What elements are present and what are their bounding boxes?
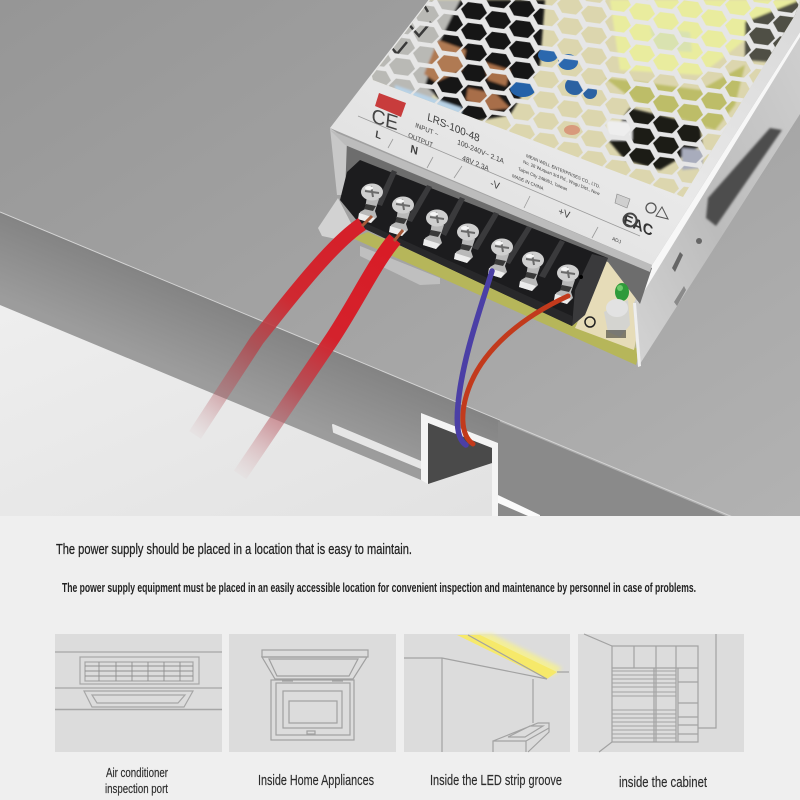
caption: LED groove: Inside the LED strip groove	[430, 773, 562, 789]
caption: cabinet: inside the cabinet	[619, 775, 707, 791]
terminal screws	[358, 184, 579, 304]
power supply unit	[318, 0, 800, 367]
panel: home appliance	[229, 634, 396, 752]
LED and potentiometer	[604, 283, 630, 338]
label printing on cover: INPUT ~	[415, 122, 439, 139]
label printing on cover: 100-240V~ 2.1A	[457, 139, 505, 166]
wires: red input cables fading, blue and orange output wires	[195, 216, 568, 475]
label printing on cover: Taipei City 248951, Taiwan	[518, 166, 568, 192]
side face	[633, 32, 800, 367]
label printing on cover: -V	[490, 178, 501, 193]
aluminium groove profile	[333, 413, 540, 516]
caption: air conditioner: Air conditioner	[106, 766, 168, 780]
panel: air conditioner inspection port	[55, 634, 222, 752]
label printing on cover	[358, 93, 668, 246]
heading: The power supply should be placed in a location that is easy to maintain.	[56, 542, 412, 558]
Mean Well logo	[375, 93, 406, 117]
label printing on cover: OUTPUT	[408, 132, 433, 149]
terminal block	[340, 160, 608, 326]
yellow LED glow	[457, 634, 562, 679]
panel: cabinet	[578, 634, 744, 752]
label printing on cover: N	[410, 143, 419, 158]
scene: surface with groove	[0, 0, 800, 547]
caption: air conditioner: inspection port	[105, 782, 168, 796]
label printing on cover: ADJ	[612, 236, 622, 246]
label printing on cover: 48V 2.3A	[462, 155, 489, 173]
front cavity shadow	[345, 142, 652, 304]
label printing on cover: L	[375, 129, 382, 142]
panel: LED strip groove	[404, 634, 570, 752]
label printing on cover: MADE IN CHINA	[512, 173, 544, 191]
left mounting flange	[318, 198, 352, 242]
caption: home appliances: Inside Home Appliances	[258, 773, 374, 789]
label printing on cover: EAC	[622, 211, 654, 240]
label printing on cover: LRS-100-48	[427, 111, 481, 145]
label printing on cover: MEAN WELL ENTERPRISES CO., LTD.	[526, 153, 601, 189]
PCB and olive edge	[352, 232, 652, 365]
internal parts seen through mesh	[360, 0, 800, 210]
CE mark: CE	[371, 105, 399, 135]
label printing on cover: No. 28 Wuquan 3rd Rd., Wugu Dist., New	[523, 159, 601, 197]
caption: air conditioner	[105, 766, 168, 796]
label printing on cover: +V	[558, 206, 571, 222]
top cover panel	[330, 0, 800, 265]
